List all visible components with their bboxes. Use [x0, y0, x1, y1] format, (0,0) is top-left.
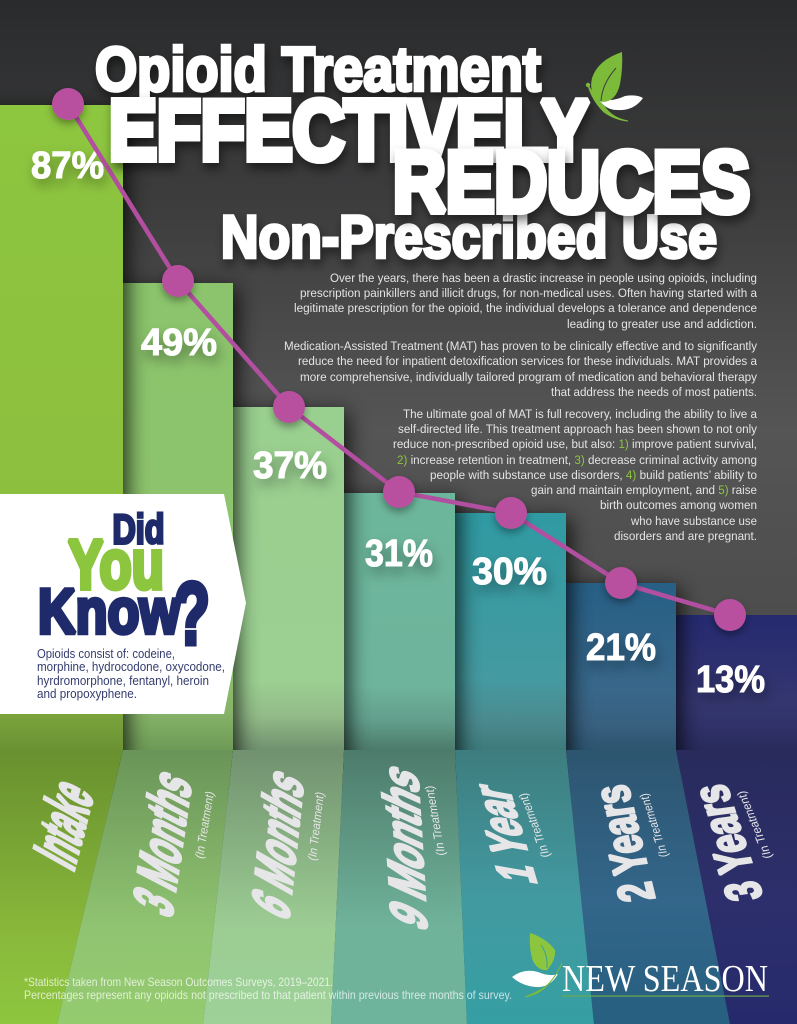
label: Intake: Intake [22, 767, 106, 880]
bar: 3 Years [676, 615, 797, 750]
percentage labels: 49% [141, 322, 217, 364]
percentage labels: 13% [696, 659, 765, 701]
footnote [24, 975, 512, 1002]
callout body text: Opioids consist of: codeine, [37, 646, 175, 661]
panel: floor reflections [0, 750, 797, 1024]
percentage labels: 30% [472, 551, 547, 593]
intro text: people with substance use disorders, 4) build patients’ ability to [430, 468, 757, 482]
intro text: disorders and are pregnant. [614, 529, 757, 543]
label: 3 Years: 3 Years [682, 782, 774, 904]
intro text [284, 271, 758, 543]
icon: title leaf [586, 52, 643, 121]
percentage labels [31, 145, 765, 701]
intro text: more comprehensive, individually tailored program of medication and behavioral therapy [300, 370, 758, 384]
label: 9 Months: 9 Months [372, 755, 439, 938]
title line: EFFECTIVELY: EFFECTIVELY [109, 84, 589, 178]
label: 2 Years: 2 Years [583, 782, 666, 905]
label: 2 Years in treatment: (In Treatment) [637, 791, 671, 859]
label: 3 Months: 3 Months [122, 758, 203, 926]
percentage labels: 21% [586, 627, 656, 669]
icon: logo leaf [512, 933, 562, 997]
intro text: gain and maintain employment, and 5) raise [531, 483, 757, 497]
label: 6 Months: 6 Months [243, 757, 315, 930]
bar: 3 Months [123, 283, 233, 750]
label: 6 Months in treatment: (In Treatment) [305, 791, 327, 861]
intro text: The ultimate goal of MAT is full recovery, including the ability to live a [403, 407, 757, 421]
label: 1 Year: 1 Year [460, 780, 549, 887]
bar: 9 Months [344, 493, 455, 750]
callout body text: and propoxyphene. [37, 686, 137, 701]
heading: Know: Know [38, 577, 181, 647]
percentage labels: 87% [31, 145, 104, 187]
bar: 1 Year [455, 513, 566, 750]
label: 9 Months in treatment: (In Treatment) [422, 785, 448, 857]
percentage labels: 31% [365, 533, 433, 575]
label: 3 Months in treatment: (In Treatment) [192, 790, 217, 859]
panel: bars [0, 105, 797, 789]
title line: Non-Prescribed Use: Non-Prescribed Use [221, 204, 717, 270]
title [95, 36, 750, 270]
intro text: prescription painkillers and illicit drugs, for non-medical uses. Often having started with a [300, 286, 757, 300]
bar: 6 Months [233, 407, 344, 750]
intro text: birth outcomes among women [600, 498, 757, 512]
label: 3 Years in treatment: (In Treatment) [734, 789, 775, 861]
logo: New Season [512, 933, 769, 1000]
footnote: Percentages represent any opioids not prescribed to that patient within previous three months of survey. [24, 988, 512, 1002]
intro text: legitimate prescription for the opioid, the individual develops a tolerance and dependence [294, 301, 757, 315]
intro text: Over the years, there has been a drastic increase in people using opioids, including [330, 271, 757, 285]
intro text: reduce non-prescribed opioid use, but also: 1) improve patient survival, [393, 437, 757, 451]
line chart: trend line and dots [52, 88, 746, 631]
intro text: who have substance use [630, 514, 757, 528]
intro text: that address the needs of most patients. [551, 385, 757, 399]
bar: Intake [0, 105, 123, 750]
intro text: self-directed life. This treatment approach has been shown to not only [398, 422, 758, 436]
callout body text: hyrdromorphone, fentanyl, heroin [37, 673, 209, 688]
heading: question mark: ? [174, 564, 210, 663]
bar: 2 Years [566, 583, 676, 750]
panel: did you know callout [0, 494, 246, 714]
heading: Did: Did [112, 506, 164, 552]
callout body text: morphine, hydrocodone, oxycodone, [37, 659, 225, 674]
heading: You: You [68, 526, 164, 604]
intro text: reduce the need for inpatient detoxification services for these individuals. MAT provides a [298, 354, 757, 368]
label: 1 Year in treatment: (In Treatment) [516, 791, 553, 860]
title line: Opioid Treatment: Opioid Treatment [95, 36, 541, 104]
timeline labels [22, 755, 775, 938]
percentage labels: 37% [253, 445, 327, 487]
intro text: Medication-Assisted Treatment (MAT) has proven to be clinically effective and to significantly [284, 339, 758, 353]
callout body text [37, 646, 225, 701]
footnote: *Statistics taken from New Season Outcomes Surveys, 2019–2021. [24, 975, 333, 989]
intro text: leading to greater use and addiction. [567, 317, 757, 331]
intro text: 2) increase retention in treatment, 3) decrease criminal activity among [397, 453, 757, 467]
